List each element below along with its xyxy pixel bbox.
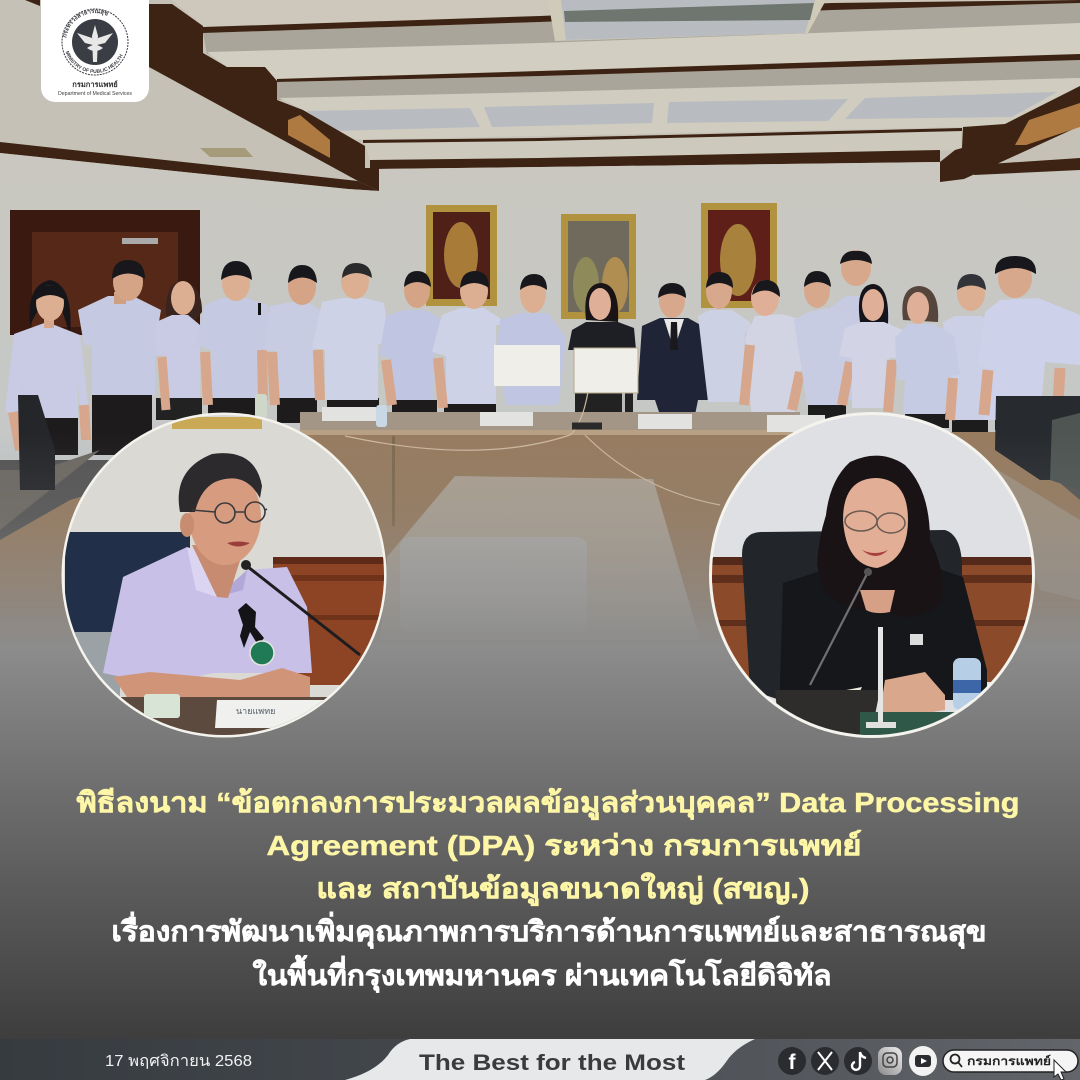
ribbon bbox=[238, 603, 264, 648]
pen stand bbox=[878, 627, 883, 722]
icon: X bbox=[811, 1047, 839, 1075]
date: 17 พฤศจิกายน 2568 bbox=[105, 1053, 252, 1070]
icon: youtube bbox=[909, 1046, 937, 1076]
icon: instagram bbox=[878, 1047, 902, 1075]
wood panel bbox=[273, 557, 388, 685]
hair bbox=[817, 456, 941, 572]
subtitle line 2: ในพื้นที่กรุงเทพมหานคร ผ่านเทคโนโลยีดิจิทัล bbox=[252, 954, 832, 993]
ceiling trim lines bbox=[203, 0, 1080, 33]
ceiling bbox=[0, 0, 1080, 195]
person 11 navy suit bbox=[637, 283, 713, 415]
jacket bbox=[780, 567, 987, 700]
title line 1: พิธีลงนาม “ข้อตกลงการประมวลผลข้อมูลส่วนบุคคล” Data Processing bbox=[76, 787, 1020, 820]
slogan ribbon: The Best for the Most bbox=[419, 1050, 686, 1075]
search pill: กรมการแพทย์ bbox=[967, 1054, 1051, 1068]
arms bbox=[113, 668, 310, 698]
group of staff in lavender uniforms bbox=[5, 250, 1080, 455]
person 19 bbox=[978, 256, 1080, 430]
title line 3: และ สถาบันข้อมูลขนาดใหญ่ (สขญ.) bbox=[316, 872, 810, 906]
back wall bbox=[0, 153, 1080, 460]
circular portrait: female speaker bbox=[705, 410, 1040, 740]
icon: tiktok bbox=[844, 1047, 872, 1075]
icon: facebook: f bbox=[788, 1051, 796, 1074]
cursor bbox=[1054, 1060, 1066, 1080]
neck bbox=[192, 545, 245, 598]
face bbox=[843, 478, 908, 568]
hands bbox=[883, 672, 945, 712]
chair bbox=[742, 530, 962, 700]
table bbox=[120, 697, 328, 735]
person 3 bbox=[155, 281, 202, 420]
person 2 bbox=[78, 260, 161, 455]
table bbox=[775, 690, 878, 735]
water bottle bbox=[953, 658, 981, 710]
person 16 bbox=[839, 284, 905, 412]
department name English: Department of Medical Services bbox=[58, 91, 133, 97]
person 13 bbox=[744, 280, 810, 420]
person 6 bbox=[312, 263, 389, 412]
person 18 bbox=[943, 274, 992, 448]
wooden door bbox=[10, 210, 200, 335]
person 10 woman in black bbox=[568, 283, 636, 414]
skylight panels bbox=[306, 0, 1057, 131]
left wooden beam bbox=[149, 4, 379, 191]
microphone bbox=[810, 572, 868, 685]
name plate: นายแพทย bbox=[236, 706, 275, 716]
royal portraits bbox=[426, 203, 777, 319]
name plate bbox=[215, 700, 330, 728]
footer bar bbox=[0, 1039, 1080, 1080]
wood panel bbox=[712, 557, 1037, 682]
cup bbox=[144, 694, 180, 718]
circular portrait: male speaker bbox=[60, 410, 390, 740]
shirt bbox=[103, 547, 312, 685]
caduceus emblem bbox=[77, 25, 113, 62]
department name Thai: กรมการแพทย์ bbox=[72, 80, 118, 89]
right wooden beam bbox=[940, 86, 1080, 182]
signed agreement boards bbox=[494, 345, 638, 428]
subtitle line 1: เรื่องการพัฒนาเพิ่มคุณภาพการบริการด้านการแพทย์และสาธารณสุข bbox=[112, 911, 987, 949]
head bbox=[189, 469, 261, 565]
glasses bbox=[845, 511, 905, 533]
ministry seal bbox=[62, 8, 128, 76]
title line 2: Agreement (DPA) ระหว่าง กรมการแพทย์ bbox=[266, 830, 862, 861]
person 5 bbox=[264, 265, 320, 423]
microphone bbox=[243, 563, 360, 655]
dark chairs at right and left bbox=[18, 395, 1080, 490]
icon: facebook bbox=[778, 1047, 806, 1075]
headline text bbox=[76, 787, 1020, 993]
pin bbox=[910, 634, 923, 645]
person 12 bbox=[698, 272, 754, 402]
ministry seal: MINISTRY OF PUBLIC HEALTH bbox=[66, 50, 123, 73]
logo tab bbox=[41, 0, 149, 102]
person 1 bbox=[5, 280, 88, 455]
person 15 back row bbox=[827, 250, 890, 400]
slogan ribbon bbox=[345, 1039, 755, 1080]
search pill bbox=[943, 1050, 1078, 1072]
conference table bbox=[0, 392, 1080, 650]
background photo: meeting room bbox=[0, 0, 1080, 650]
person 7 bbox=[379, 271, 442, 414]
person 17 bbox=[895, 286, 960, 428]
person 9 bbox=[497, 274, 566, 405]
person 8 bbox=[432, 271, 503, 415]
glasses bbox=[192, 502, 267, 523]
chair bbox=[65, 532, 190, 637]
person 4 bbox=[195, 261, 272, 423]
ministry seal: กระทรวงสาธารณสุข bbox=[63, 10, 108, 38]
badge bbox=[250, 641, 274, 665]
person 14 bbox=[794, 271, 856, 423]
